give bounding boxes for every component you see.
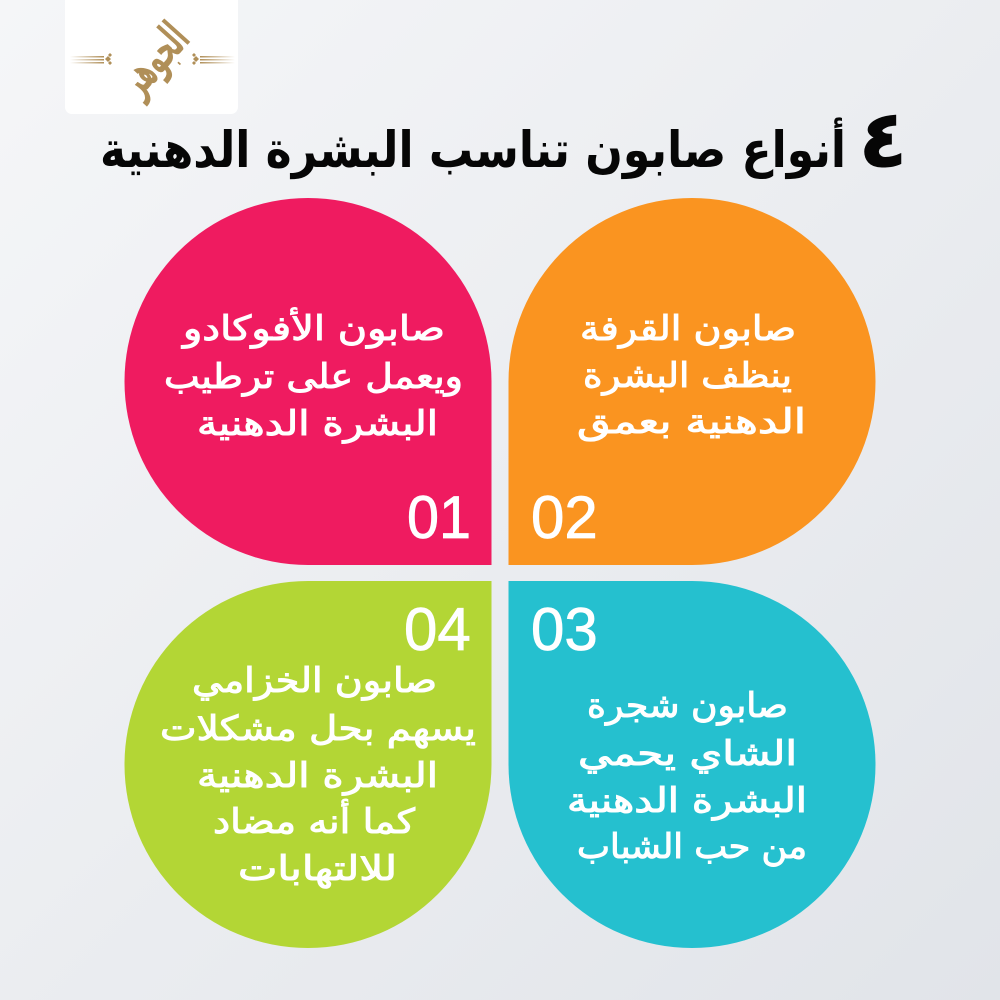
text: lavender soap bbox=[160, 661, 476, 889]
text: tea tree soap: صابون شجرة bbox=[587, 686, 788, 726]
number 04: 04 bbox=[404, 596, 471, 663]
text: cinnamon soap: صابون القرفة bbox=[580, 309, 796, 349]
title bbox=[100, 93, 907, 185]
title: أنواع صابون تناسب البشرة الدهنية bbox=[100, 117, 846, 180]
number 03: 03 bbox=[531, 596, 598, 663]
text: avocado soap bbox=[164, 307, 463, 444]
text: avocado soap: صابون الأفوكادو bbox=[181, 307, 445, 349]
number 02: 02 bbox=[531, 484, 598, 551]
text: tea tree soap: من حب الشباب bbox=[577, 827, 807, 867]
title numeral: ٤ bbox=[859, 93, 907, 185]
panel: petal 03 tea tree soap bbox=[508, 581, 876, 948]
text: lavender soap: كما أنه مضاد bbox=[213, 799, 416, 842]
panel: petal 01 avocado soap bbox=[124, 198, 491, 565]
panel: petal 04 lavender soap bbox=[124, 581, 491, 948]
text: cinnamon soap bbox=[577, 309, 806, 442]
text: lavender soap: يسهم بحل مشكلات bbox=[160, 709, 476, 749]
text: lavender soap: للالتهابات bbox=[238, 849, 397, 889]
number 01: 01 bbox=[407, 484, 471, 551]
text: avocado soap: ويعمل على ترطيب bbox=[164, 357, 463, 397]
text: tea tree soap: البشرة الدهنية bbox=[567, 781, 807, 821]
panel: petal 02 cinnamon soap bbox=[508, 198, 876, 565]
text: avocado soap: البشرة الدهنية bbox=[197, 404, 438, 444]
text: cinnamon soap: الدهنية بعمق bbox=[577, 402, 806, 442]
text: cinnamon soap: ينظف البشرة bbox=[583, 356, 792, 396]
text: tea tree soap: الشاي يحمي bbox=[578, 734, 797, 774]
text: tea tree soap bbox=[567, 686, 807, 867]
text: lavender soap: صابون الخزامي bbox=[192, 661, 437, 701]
logo card bbox=[65, 0, 238, 114]
text: lavender soap: البشرة الدهنية bbox=[197, 756, 438, 796]
